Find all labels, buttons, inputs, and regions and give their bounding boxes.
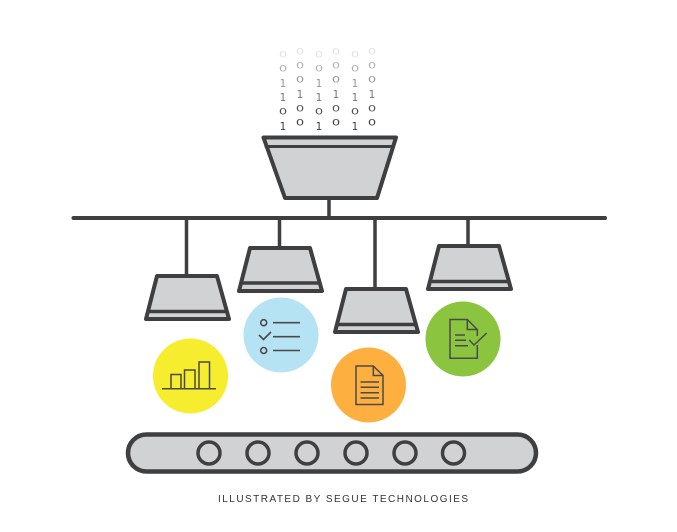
lamp funnel 3 [335,289,418,332]
lamp funnel 1 [146,276,229,319]
binary digits falling into funnel: 1 [352,78,358,90]
binary digits falling into funnel: 1 [369,89,375,101]
binary digits falling into funnel: 0 [332,74,340,85]
icon: bar chart in yellow circle [153,338,228,414]
binary digits falling into funnel: 1 [352,121,358,133]
binary digits falling into funnel: 0 [332,46,340,57]
binary digits falling into funnel: 0 [296,74,304,85]
binary digits falling into funnel: 1 [297,89,303,101]
binary digits falling into funnel: 1 [352,92,358,104]
binary digits falling into funnel: 0 [368,60,376,71]
binary digits falling into funnel: 0 [296,46,304,57]
binary digits falling into funnel: 0 [332,60,340,71]
binary digits falling into funnel: 0 [296,117,304,128]
binary digits falling into funnel: 0 [351,49,359,60]
distribution bar with stems [74,198,605,289]
binary digits falling into funnel: 0 [315,63,323,74]
binary digits falling into funnel: 1 [280,121,286,133]
binary digits falling into funnel: 0 [332,117,340,128]
binary digits falling into funnel: 0 [351,63,359,74]
binary digits falling into funnel: 0 [315,49,323,60]
lamp funnel 2 [239,248,322,291]
binary digits falling into funnel: 0 [368,46,376,57]
binary digits falling into funnel: 1 [280,78,286,90]
binary digits falling into funnel: 1 [316,78,322,90]
binary digits falling into funnel: 0 [368,74,376,85]
binary digits falling into funnel: 0 [368,117,376,128]
icon: checklist in blue circle [244,298,318,372]
icon: approved document in green circle [426,302,500,376]
binary digits falling into funnel: 0 [351,106,359,117]
binary digits falling into funnel [279,46,376,133]
binary digits falling into funnel: 0 [296,60,304,71]
binary digits falling into funnel: 0 [332,103,340,114]
binary digits falling into funnel: 0 [279,63,287,74]
binary digits falling into funnel: 1 [280,92,286,104]
main funnel [264,138,396,198]
binary digits falling into funnel: 1 [316,121,322,133]
binary digits falling into funnel: 0 [368,103,376,114]
binary digits falling into funnel: 1 [333,89,339,101]
binary digits falling into funnel: 0 [279,106,287,117]
binary digits falling into funnel: 1 [316,92,322,104]
conveyor belt [128,434,536,472]
binary digits falling into funnel: 0 [279,49,287,60]
caption: ILLUSTRATED BY SEGUE TECHNOLOGIES [218,494,468,505]
lamp funnel 4 [428,246,511,289]
binary digits falling into funnel: 0 [296,103,304,114]
icon: document in orange circle [331,348,406,422]
binary digits falling into funnel: 0 [315,106,323,117]
